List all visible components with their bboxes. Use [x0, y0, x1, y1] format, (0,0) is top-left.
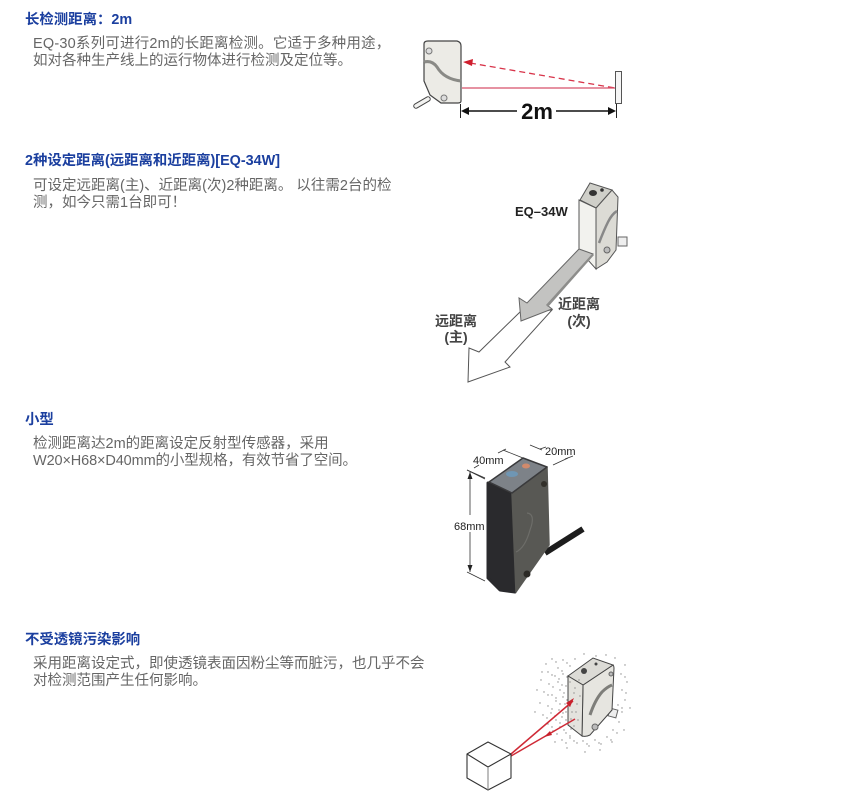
text: two distance settings: 测，如今只需1台即可！	[33, 195, 186, 211]
heading: long detection distance: 长检测距离：2m	[25, 12, 132, 28]
icon: compact sensor body	[488, 458, 549, 592]
text: two distance settings	[33, 177, 391, 211]
label: near distance: 近距离	[558, 296, 600, 312]
label: far distance main: (主)	[444, 329, 468, 345]
arrow: far distance (white)	[468, 310, 552, 382]
diagram: 2m detection	[416, 41, 622, 124]
arrow: reflected beam	[511, 719, 575, 756]
dimension: 2m	[460, 99, 616, 124]
dimension: 68mm	[454, 470, 485, 581]
text: long detection distance	[33, 35, 390, 69]
icon: target cube	[467, 742, 511, 790]
text: lens contamination: 对检测范围产生任何影响。	[33, 673, 207, 689]
dimension: 20mm	[530, 445, 576, 465]
label: EQ-34W: EQ–34W	[515, 204, 568, 219]
diagram: compact sensor dimensions	[454, 445, 583, 592]
arrow: emitted beam	[511, 698, 574, 754]
heading: two distance settings: 2种设定距离(远距离和近距离)[EQ-34W]	[25, 153, 280, 169]
text: compact	[33, 435, 357, 469]
icon: sensor side view	[416, 41, 461, 106]
dimension: 40mm: 40mm	[473, 455, 504, 467]
text: lens contamination: 采用距离设定式，即使透镜表面因粉尘等而脏污，也几乎不会	[33, 656, 424, 672]
arrow: emitted beam	[462, 87, 615, 89]
diagram: EQ-34W two distances	[435, 183, 627, 382]
heading: compact: 小型	[25, 412, 54, 428]
dimension: 2m: 2m	[521, 99, 553, 124]
arrow: near distance (gray)	[519, 249, 594, 321]
label: far distance: 远距离	[435, 313, 477, 329]
label: near distance secondary: (次)	[567, 313, 591, 329]
text: long detection distance: 如对各种生产线上的运行物体进行检测及定位等。	[33, 53, 352, 69]
icon: sensor with dirty lens	[568, 658, 618, 736]
heading: lens contamination: 不受透镜污染影响	[25, 632, 140, 648]
text: compact: 检测距离达2m的距离设定反射型传感器，采用	[33, 436, 329, 452]
icon: target plate	[616, 72, 622, 104]
dimension: 40mm	[467, 449, 523, 478]
text: two distance settings: 可设定远距离(主)、近距离(次)2种距离。 以往需2台的检	[33, 178, 391, 194]
diagram: lens contamination	[467, 654, 630, 790]
text: long detection distance: EQ-30系列可进行2m的长距离检测。它适于多种用途，	[33, 36, 390, 52]
dimension: 68mm: 68mm	[454, 521, 485, 533]
dimension: 20mm: 20mm	[545, 446, 576, 458]
dust particles	[535, 654, 630, 752]
text: lens contamination	[33, 655, 424, 689]
icon: sensor cable	[545, 529, 583, 553]
arrow: reflected beam	[463, 59, 615, 88]
text: compact: W20×H68×D40mm的小型规格，有效节省了空间。	[33, 453, 357, 469]
icon: EQ-34W sensor	[579, 183, 627, 269]
